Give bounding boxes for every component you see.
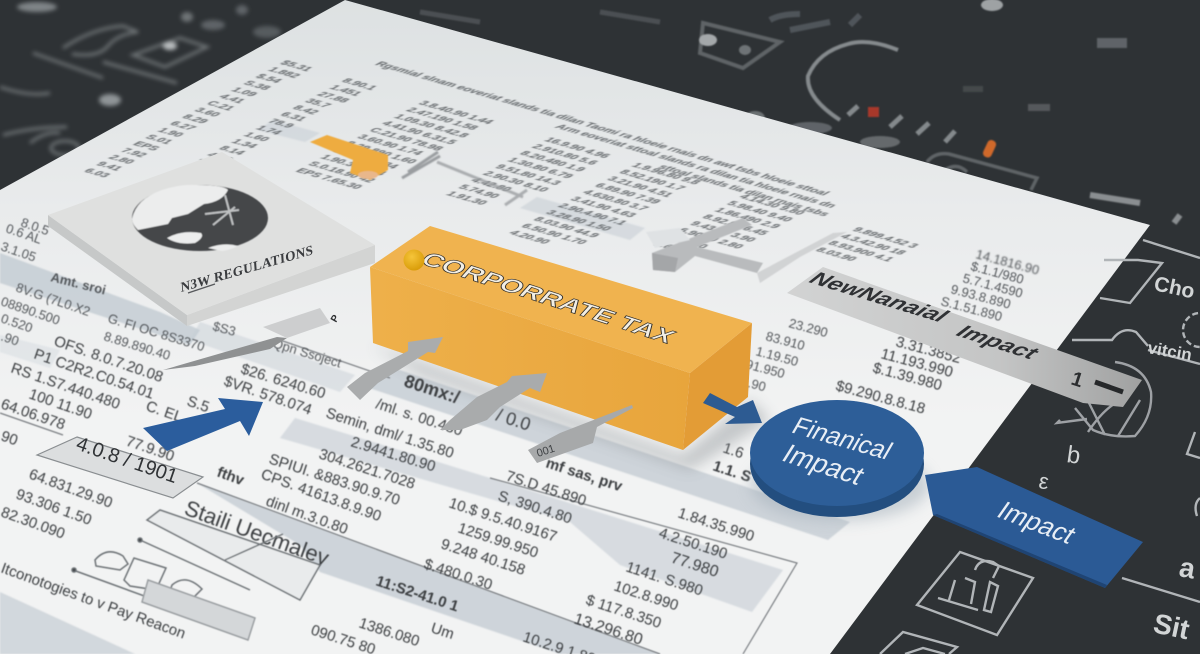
upper table rows: 3.21.90 4.51 bbox=[604, 175, 676, 199]
upper table rows: 1.74 bbox=[252, 124, 285, 137]
left table rows: 64.06.978 bbox=[0, 396, 67, 434]
left table rows: SPIUI. &883.90.9.70 bbox=[267, 451, 402, 509]
centre and lower table rows: 11.193.990 bbox=[879, 345, 955, 381]
new financial impact translucent banner: Impact bbox=[952, 321, 1045, 363]
upper table rows: Rgsmial slnam eoveriat slands tia dilan Taomi ra hloeie rnais dn awt tsbs hloeie sttoal bbox=[372, 60, 832, 197]
centre and lower table rows: 102.8.990 bbox=[612, 578, 680, 614]
upper table rows: 8.29 bbox=[179, 113, 211, 125]
upper table rows: 8.03.90 bbox=[812, 246, 860, 263]
icon: yellow pin bbox=[404, 250, 424, 270]
upper table rows: 2.80 bbox=[105, 154, 137, 166]
upper table rows: $5.31 bbox=[277, 59, 316, 73]
upper table rows: 4.630.80 3.7 bbox=[579, 189, 651, 212]
upper table rows: 35.7 bbox=[302, 97, 334, 109]
centre and lower table rows: 4.2.50.190 bbox=[657, 525, 729, 563]
icon: framed bank bbox=[917, 552, 1033, 635]
left table rows: 3.1.05 bbox=[0, 239, 38, 265]
line right bbox=[1122, 578, 1200, 602]
upper table rows: 3.60.90 1.74 bbox=[354, 133, 426, 157]
centre and lower table rows: Um bbox=[429, 620, 456, 643]
upper table rows: 6.31 bbox=[277, 111, 310, 123]
upper table rows: 4.20.90 bbox=[506, 229, 553, 246]
upper table rows: 4.14.30 9.80 bbox=[736, 193, 808, 217]
centre and lower table rows: 23.290 bbox=[787, 315, 830, 340]
left table rows: S.5 bbox=[185, 393, 212, 416]
upper table rows: 14.0 bbox=[179, 165, 211, 177]
upper table rows: 27.88 bbox=[314, 91, 353, 105]
letter a: a bbox=[1177, 551, 1198, 585]
upper table rows: 8.03.90 44.9 bbox=[530, 216, 602, 239]
upper table rows: 7.92 bbox=[117, 147, 149, 159]
upper table rows: 3.28.90 1.50 bbox=[542, 209, 614, 233]
upper table rows: EPS 7.65.30 bbox=[292, 167, 365, 191]
date stamp box: 4.0.8 / 1901 bbox=[73, 433, 180, 488]
grey arrow 1 bbox=[163, 308, 342, 370]
upper table rows: 3.60 bbox=[191, 106, 223, 118]
centre and lower table rows: 1.1. S bbox=[711, 458, 753, 486]
centre and lower table rows: 13.296.80 bbox=[572, 611, 645, 649]
block shadow bbox=[372, 345, 770, 470]
centre and lower table rows: 11:S2-41.0 1 bbox=[374, 573, 461, 615]
icon: document bbox=[880, 632, 957, 654]
left table rows: CPS. 41613.8.9.90 bbox=[259, 466, 384, 525]
table shading bands bbox=[0, 120, 850, 654]
upper table rows: 2.90.30 8.10 bbox=[480, 170, 551, 194]
left table rows: Staili Uecmaley bbox=[181, 495, 332, 571]
upper table rows: 8.92.80 6.45 bbox=[699, 213, 771, 237]
upper table rows: 1.60 bbox=[240, 131, 272, 143]
left table rows bbox=[0, 215, 456, 642]
upper table rows: 4.41.90 6.31.5 bbox=[378, 120, 460, 146]
centre and lower table rows: 77.980 bbox=[669, 550, 721, 581]
left table rows: fthv bbox=[215, 464, 247, 489]
background line art: top centre and right bbox=[420, 0, 1180, 223]
icon: choice box bbox=[1100, 240, 1200, 303]
left table rows: $S3 bbox=[211, 318, 237, 339]
centre and lower table rows: 1141. S.980 bbox=[624, 559, 705, 599]
left table rows: P1 C2R2.C0.54.01 bbox=[32, 346, 156, 403]
date stamp box bbox=[37, 433, 203, 498]
icon: gold clip tab bbox=[310, 135, 388, 180]
centre and lower table rows: 10.$ 9.5.40.9167 bbox=[447, 495, 559, 546]
upper table rows: 5.74.90 bbox=[455, 183, 502, 200]
circle shadow bbox=[750, 449, 930, 521]
new regulations card bbox=[48, 152, 375, 326]
centre and lower table rows: $.1.1/980 bbox=[969, 258, 1025, 287]
upper table rows: 5.98.40 9.40 bbox=[724, 200, 795, 223]
grey arrow 2 bbox=[347, 337, 443, 400]
upper table rows: 1.90 bbox=[154, 127, 186, 139]
upper table rows: C.21 bbox=[203, 100, 238, 112]
upper table rows: 6.89.90 7.39 bbox=[591, 182, 663, 206]
upper table rows: S.0.18.90 42 bbox=[305, 160, 378, 184]
icon: grey floating bracket bbox=[646, 218, 847, 283]
grey arrow 4 bbox=[528, 405, 633, 463]
block label: CORPORRATE TAX bbox=[415, 249, 680, 348]
upper table rows: S.18.90 bbox=[662, 233, 711, 250]
right side background icons bbox=[880, 240, 1200, 654]
upper table rows: 8.14 bbox=[216, 145, 248, 157]
left table rows: 0.6 AL bbox=[4, 221, 44, 247]
left table rows: 64.831.29.90 bbox=[27, 466, 115, 512]
left table rows: Itconotogies to v Pay Reacon bbox=[0, 560, 188, 642]
left table rows: $VR. 578.074 bbox=[222, 373, 314, 419]
upper table rows: 7.65 bbox=[191, 158, 224, 170]
label: site: Sit bbox=[1151, 608, 1192, 645]
centre and lower table rows: 1386.080 bbox=[357, 615, 422, 650]
left table rows: 77.9.90 bbox=[124, 433, 177, 465]
upper table rows: 6.03 bbox=[81, 167, 113, 179]
centre and lower table rows: 9.248 40.158 bbox=[439, 536, 527, 579]
upper table rows: 42.6 bbox=[203, 151, 235, 163]
upper table rows: 1.90.30 8.14 bbox=[317, 153, 389, 177]
left table rows: 8V.G (7L0.X2 bbox=[14, 280, 92, 319]
upper table rows: 6.27.90 1.34 bbox=[329, 147, 402, 171]
upper table rows: 2.47.190 1.58 bbox=[403, 106, 481, 132]
upper table rows: 1.09.30 8.42.8 bbox=[391, 113, 472, 140]
disc label: Finanical bbox=[787, 413, 897, 465]
left table rows: Amt. sroi bbox=[49, 269, 108, 298]
grey arrow 4: 001 bbox=[535, 443, 556, 460]
corporate tax block bbox=[370, 226, 752, 450]
upper table rows: 8.42 bbox=[289, 104, 321, 116]
centre and lower table rows: 1.19.50 bbox=[754, 343, 800, 369]
upper table rows: 8.20.480 1.9 bbox=[516, 150, 588, 173]
left table rows: 0.520 bbox=[0, 311, 35, 335]
letter b: b bbox=[1065, 441, 1082, 470]
upper table rows: 9.41 bbox=[93, 160, 126, 173]
upper table rows: sttoal slands tia dilan rnais tsbs bbox=[654, 163, 832, 218]
upper table rows: 9.51.80 14.3 bbox=[492, 163, 564, 187]
grey arrow 3 bbox=[440, 373, 547, 430]
centre and lower table rows: $.1.39.980 bbox=[871, 359, 944, 394]
upper table rows: 4.41 bbox=[216, 93, 248, 105]
icon: grey pushpin top bbox=[402, 152, 527, 205]
upper table rows: 1.30.80 6.79 bbox=[504, 156, 576, 180]
financial impact disc: Impact bbox=[777, 438, 871, 490]
upper table rows: 2.90.4.90 7.1 bbox=[555, 202, 630, 227]
left table rows: Semin, dml/ 1.35.80 bbox=[324, 405, 456, 462]
upper table rows: 9.899.4.52 3 bbox=[849, 226, 921, 250]
centre and lower table rows: $9.290.8.8.18 bbox=[834, 377, 927, 418]
upper table rows: 16.9.90 4.96 bbox=[541, 136, 613, 160]
centre and lower table rows: 14.1816.90 bbox=[974, 246, 1041, 278]
upper table rows: 1.91.30 bbox=[443, 190, 490, 207]
upper table rows: 78.9 bbox=[265, 118, 297, 130]
left table rows: RS 1.S7.440.480 bbox=[9, 360, 122, 413]
lower diagram sketch bbox=[72, 510, 320, 640]
upper table rows: 1.34 bbox=[228, 138, 261, 150]
upper table rows: 8.90.1 bbox=[338, 77, 380, 92]
upper table rows: 7.61.90 bbox=[650, 240, 697, 257]
centre and lower table rows: 1.6 bbox=[721, 440, 746, 462]
centre and lower table rows: /ml. s. 00.480 bbox=[374, 396, 465, 440]
left table rows: 100 11.90 bbox=[27, 386, 94, 423]
upper table rows: 2.910.80 5.6 bbox=[529, 143, 600, 167]
upper table rows: 1.451 bbox=[326, 84, 365, 98]
icon: right edge item bbox=[1187, 432, 1200, 516]
upper table rows: 6.90.80 2.80 bbox=[674, 227, 746, 250]
centre and lower table rows: 1.84.35.990 bbox=[676, 505, 756, 545]
impact arrow tag bbox=[925, 467, 1143, 588]
left table rows: dinl m.3.0.80 bbox=[264, 493, 350, 538]
centre and lower table rows: S.1.51.890 bbox=[939, 293, 1004, 324]
left table rows: 8.89.890.40 bbox=[102, 329, 172, 363]
icon: gear bbox=[1183, 313, 1200, 347]
upper table rows: 8.29.890 1.60 bbox=[342, 140, 420, 165]
upper table rows: S.01 bbox=[142, 133, 176, 146]
left table rows: $26. 6240.60 bbox=[239, 361, 328, 402]
centre and lower table rows: / 0.0 bbox=[494, 405, 533, 435]
centre and lower table rows: 1259.99.950 bbox=[456, 520, 540, 562]
left table rows: C. EL bbox=[144, 398, 185, 426]
centre and lower table rows: mf sas, prv bbox=[544, 455, 625, 495]
left table rows: 82.30.090 bbox=[0, 504, 67, 543]
upper table rows: 6.27 bbox=[167, 120, 199, 132]
banner key mark: 1 bbox=[1068, 368, 1086, 392]
new financial impact translucent banner bbox=[787, 267, 1142, 407]
icon: head sketch bbox=[1057, 362, 1151, 436]
centre and lower table rows: 91.950 bbox=[744, 356, 787, 381]
upper table rows: 6.50.90 1.70 bbox=[518, 222, 590, 246]
centre and lower table rows: 7S.D 45.890 bbox=[504, 468, 588, 510]
upper table rows: 3.8.40.90 1.44 bbox=[415, 99, 497, 126]
upper table rows: 4.42.80 bbox=[467, 177, 515, 193]
new financial impact translucent banner: NewNanaial bbox=[805, 268, 954, 326]
upper table rows: 8.93.900 4.1 bbox=[825, 240, 897, 263]
small blue arrow bbox=[703, 393, 762, 424]
upper table rows: 1.882 bbox=[265, 66, 303, 80]
icon: globe bbox=[132, 185, 268, 251]
grey arrow 1: P bbox=[329, 313, 342, 324]
upper table rows: 1.86.490 2.9 bbox=[711, 207, 783, 230]
left table rows: 08890.500 bbox=[0, 294, 62, 328]
centre and lower table rows: 6.90 bbox=[739, 373, 768, 394]
centre and lower table rows: 80mx:/ bbox=[402, 371, 462, 407]
centre and lower table rows: $.480.0.30 bbox=[422, 556, 494, 594]
centre and lower table rows: $ 117.8.350 bbox=[584, 592, 663, 632]
left table rows: 93.306 1.50 bbox=[14, 486, 94, 529]
centre and lower table rows: S, 390.4.80 bbox=[496, 488, 574, 528]
upper table rows: 3.41.90 4.63 bbox=[567, 195, 639, 219]
table divider lines bbox=[0, 340, 797, 654]
left table rows: G. FI OC 8S3370 bbox=[106, 311, 207, 354]
upper table rows: S.38 bbox=[240, 79, 274, 92]
impact arrow tag: Impact bbox=[992, 496, 1082, 549]
left table rows: 304.2621.7028 bbox=[317, 446, 417, 493]
left table rows: 2.9441.80.90 bbox=[349, 434, 438, 475]
upper table rows: 4.3.42.90 18 bbox=[837, 233, 909, 257]
financial impact disc bbox=[750, 400, 924, 517]
centre and lower table rows: 5.7.1.4590 bbox=[961, 270, 1024, 301]
card label: N3W REGULATIONS bbox=[180, 242, 314, 295]
upper table rows: 8.52.190 1.7 bbox=[616, 168, 688, 192]
centre and lower table rows: 3.31.3852 bbox=[894, 333, 963, 367]
left table rows: Qpn Ssoject bbox=[271, 336, 344, 371]
centre and lower table rows: 83.910 bbox=[764, 328, 807, 353]
upper table rows: 9.43.30 3.90 bbox=[687, 220, 759, 244]
upper table rows: EPS bbox=[130, 140, 163, 152]
upper table rows: $.54 bbox=[252, 73, 285, 85]
icon: vitcin label: vitcin bbox=[1146, 338, 1193, 365]
letter e: ε bbox=[1037, 468, 1051, 494]
centre and lower table rows: 9.93.8.890 bbox=[949, 281, 1012, 312]
blue arrow left bbox=[143, 398, 263, 451]
centre and lower table rows bbox=[309, 246, 1041, 654]
left table rows: 8.0.5 bbox=[19, 215, 51, 238]
upper table rows bbox=[84, 60, 920, 262]
upper table rows: 1.09 bbox=[228, 86, 260, 98]
upper table rows: Arm eoveriat sttoal slands ra dilan tia hloeie rnais dn bbox=[552, 123, 839, 210]
upper table rows: 1.9.96.80 9.8 bbox=[628, 162, 704, 186]
left table rows: OFS. 8.0.7.20.08 bbox=[52, 333, 165, 386]
icon: choice box: Cho bbox=[1152, 272, 1197, 303]
icon: vitcin label bbox=[1072, 330, 1200, 365]
background line art: top left bbox=[0, 2, 281, 155]
upper table rows: C.21.90 78.98 bbox=[366, 126, 446, 153]
